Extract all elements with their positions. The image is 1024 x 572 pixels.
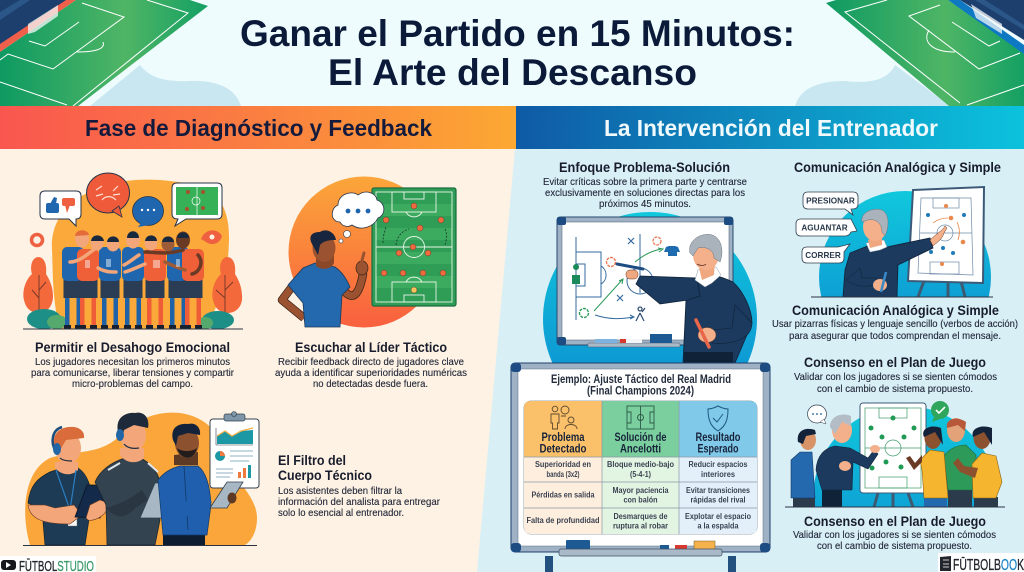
tactical board <box>860 403 926 507</box>
table cells <box>526 459 751 530</box>
speech bubbles: CORRER <box>805 251 841 260</box>
table cells: banda (3x2) <box>546 469 580 479</box>
text block: Escuchar al Líder Táctico <box>275 340 467 390</box>
figure: analyst right <box>158 424 243 545</box>
column headings: Problema <box>542 432 585 444</box>
text block: El Filtro del Cuerpo Técnico: Los asistentes deben filtrar la <box>278 486 402 497</box>
speech bubbles: PRESIONAR <box>806 196 855 206</box>
tactical board <box>372 188 456 306</box>
section header: left: Fase de Diagnóstico y Feedback <box>85 115 432 141</box>
section header: right: La Intervención del Entrenador <box>604 115 938 141</box>
logo: FútbolStudio <box>0 556 96 572</box>
table cells: interiores <box>701 469 735 479</box>
ground line <box>23 328 243 330</box>
table cells: ruptura al robar <box>613 520 669 530</box>
board legs <box>545 556 736 572</box>
text block: Consenso top: Validar con los jugadores si se sienten cómodos <box>794 372 997 383</box>
example whiteboard <box>511 363 770 572</box>
table cells: rápidas del rival <box>690 494 746 504</box>
table cells: Mayor paciencia <box>612 485 669 495</box>
table cells: con balón <box>624 494 658 504</box>
table cells: Superioridad en <box>535 459 591 469</box>
figure: analyst centre <box>95 413 180 545</box>
text block: Escuchar al Líder Táctico: Recibir feedback directo de jugadores clave <box>278 357 464 368</box>
text block: Consenso bottom: con el cambio de sistema propuesto. <box>817 541 972 552</box>
flip board <box>908 187 984 297</box>
text block: Permitir el Desahogo Emocional: micro-problemas del campo. <box>72 379 193 390</box>
text block: Permitir el Desahogo Emocional: para comunicarse, liberar tensiones y compartir <box>31 368 234 379</box>
title <box>240 13 795 93</box>
person: coach <box>816 414 880 507</box>
icon: whistle <box>201 230 222 244</box>
player pointing <box>282 230 368 327</box>
person: yellow centre <box>906 426 948 507</box>
clipboard <box>210 412 259 488</box>
frame <box>511 363 770 552</box>
icon: frustration bubble <box>86 173 130 217</box>
players <box>62 230 204 329</box>
text block: Enfoque Problema-Solución: próximos 45 minutos. <box>599 199 691 210</box>
speech bubbles <box>796 192 858 263</box>
text block: El Filtro del Cuerpo Técnico: Cuerpo Técnico <box>278 468 372 483</box>
icon: shield <box>708 406 728 431</box>
text block: Enfoque Problema-Solución: Evitar críticas sobre la primera parte y centrarse <box>543 177 747 188</box>
table cells: (5-4-1) <box>630 469 651 479</box>
heading: Comunicación top: Comunicación Analógica y Simple <box>794 160 1001 175</box>
illustration: coaching staff <box>23 412 259 546</box>
speech bubbles: AGUANTAR <box>801 224 848 232</box>
icon: check bubble <box>931 401 949 422</box>
title: El Arte del Descanso <box>328 52 697 93</box>
column headings: Detectado <box>540 444 586 456</box>
text block: Consenso top <box>794 355 997 395</box>
icon: problem <box>551 406 577 429</box>
icon: chat bubble <box>808 405 826 424</box>
background: right panel <box>0 149 1024 572</box>
illustration: tactical leader <box>282 176 456 328</box>
board title: (Final Champions 2024) <box>587 386 694 398</box>
table cells: Bloque medio-bajo <box>607 459 674 469</box>
figure: analyst left <box>28 427 115 545</box>
table cells: Explotar el espacio <box>685 511 751 521</box>
text block: Escuchar al Líder Táctico: Escuchar al Líder Táctico <box>295 340 447 355</box>
table cells: Falta de profundidad <box>526 515 600 525</box>
header blob left <box>90 65 241 106</box>
table cells: Evitar transiciones <box>686 485 750 495</box>
thought bubble <box>332 192 384 243</box>
text block: Permitir el Desahogo Emocional: Permitir el Desahogo Emocional <box>35 340 230 355</box>
text block: El Filtro del Cuerpo Técnico <box>278 453 440 519</box>
text block: Consenso top: Consenso en el Plan de Juego <box>804 355 986 370</box>
background: header <box>0 0 1024 106</box>
text block: Consenso bottom: Validar con los jugadores si se sienten cómodos <box>793 530 996 541</box>
icon: pitch <box>627 406 654 429</box>
illustration: team huddle <box>23 173 243 329</box>
illustration: coach at whiteboard <box>543 212 757 362</box>
text block: El Filtro del Cuerpo Técnico: información del analista para entregar <box>278 497 440 508</box>
table cells: a la espalda <box>698 520 739 530</box>
tray and markers <box>559 540 722 556</box>
column headings: Ancelotti <box>620 444 661 456</box>
whiteboard <box>557 217 733 347</box>
text block: Consenso bottom: Consenso en el Plan de Juego <box>804 514 986 529</box>
title: Ganar el Partido en 15 Minutos: <box>240 13 795 54</box>
header blob right <box>795 65 950 106</box>
person: left <box>791 429 816 507</box>
illustration: analog communication <box>796 186 993 298</box>
column headings: Resultado <box>696 432 740 444</box>
board title: Ejemplo: Ajuste Táctico del Real Madrid <box>551 374 731 386</box>
table <box>524 401 757 534</box>
column headings: Solución de <box>614 432 666 444</box>
text block: Escuchar al Líder Táctico: no detectadas desde fuera. <box>313 379 428 390</box>
text block: Consenso top: con el cambio de sistema propuesto. <box>817 384 973 395</box>
text block: Comunicación Analógica y Simple: para asegurar que todos comprendan el mensaje. <box>789 331 1001 342</box>
background: left panel <box>0 149 515 572</box>
icon: chat bubble <box>132 196 164 227</box>
section header: right <box>516 106 1024 149</box>
decorative pitch: top left <box>0 0 208 106</box>
section header: left <box>0 106 516 149</box>
text block: Enfoque Problema-Solución: Enfoque Problema-Solución <box>559 160 730 175</box>
logo: FútbolBook <box>938 553 1024 572</box>
text block: El Filtro del Cuerpo Técnico: solo lo esencial al entrenador. <box>278 508 404 519</box>
decorative pitch: top right <box>826 0 1024 106</box>
icon: gear <box>32 234 42 246</box>
ground line <box>23 544 257 546</box>
person: yellow right <box>953 426 1002 507</box>
board title <box>551 374 731 398</box>
text block: Permitir el Desahogo Emocional: Los jugadores necesitan los primeros minutos <box>35 357 230 368</box>
text block: Enfoque Problema-Solución <box>543 160 747 210</box>
icon: pitch bubble <box>172 183 222 226</box>
coach <box>617 234 752 363</box>
person: right green <box>944 418 976 507</box>
text block: El Filtro del Cuerpo Técnico: El Filtro del <box>278 453 346 468</box>
column headings <box>540 432 740 456</box>
icon: trees <box>23 257 242 329</box>
text block: Comunicación Analógica y Simple <box>772 303 1018 342</box>
text block: Consenso bottom <box>793 514 996 552</box>
illustration: consensus <box>785 401 1005 508</box>
coach <box>843 209 947 297</box>
text block: Permitir el Desahogo Emocional <box>31 340 234 390</box>
table cells: Pérdidas en salida <box>532 490 595 500</box>
icon: thumbs bubble <box>40 191 81 226</box>
column headings: Esperado <box>698 444 738 456</box>
text block: Comunicación Analógica y Simple: Comunicación Analógica y Simple <box>792 303 999 318</box>
text block: Enfoque Problema-Solución: exclusivamente en soluciones directas para los <box>545 188 745 199</box>
text block: Escuchar al Líder Táctico: ayuda a identificar superioridades numéricas <box>275 368 467 379</box>
table cells: Desmarques de <box>614 511 668 521</box>
table cells: Reducir espacios <box>688 459 748 469</box>
